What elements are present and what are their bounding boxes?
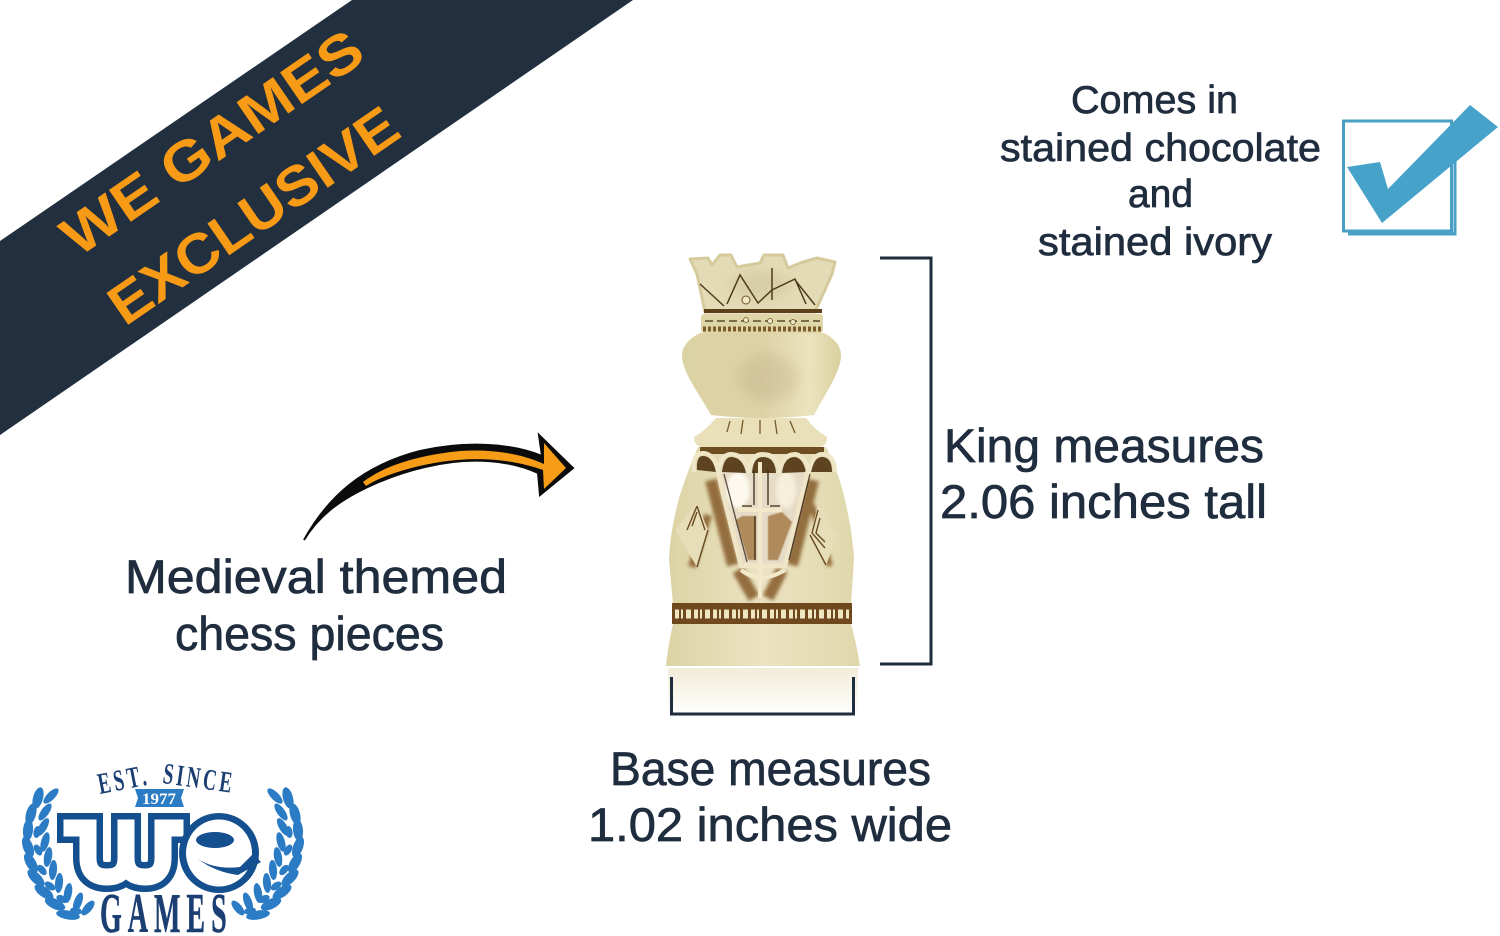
we mark [72, 813, 261, 893]
text: Medieval themed chess pieces [125, 550, 507, 660]
crown [690, 255, 835, 312]
arrow: orange curved arrow [304, 435, 573, 540]
text: Comes in stained chocolate and stained ivory: and [1128, 173, 1193, 216]
chess piece: king [666, 255, 860, 716]
text: Base measures 1.02 inches wide: 1.02 inches wide [588, 798, 952, 851]
logo: WE Games [20, 758, 306, 936]
left diamond mark [687, 506, 708, 567]
wreath left [20, 786, 97, 922]
since: SINCE [161, 758, 237, 800]
text: Medieval themed chess pieces: Medieval themed [125, 550, 507, 603]
text: King measures 2.06 inches tall: 2.06 inches tall [940, 475, 1267, 528]
text: Comes in stained chocolate and stained ivory: stained ivory [1038, 221, 1273, 264]
reflection [668, 668, 858, 716]
text: Base measures 1.02 inches wide: Base measures [610, 742, 931, 795]
shield [694, 453, 835, 598]
left diamond [675, 503, 708, 567]
shoulder [694, 418, 827, 450]
text: Comes in stained chocolate and stained ivory: Comes in [1071, 79, 1238, 122]
bowl [682, 333, 841, 418]
text: Comes in stained chocolate and stained ivory [1000, 79, 1321, 264]
shield shadows [692, 480, 830, 598]
bracket: base width [672, 677, 854, 714]
decorative band [672, 603, 852, 624]
base [666, 624, 860, 666]
text: Medieval themed chess pieces: chess pieces [175, 607, 444, 660]
right diamond [810, 505, 838, 565]
icon: blue checkbox with check mark [1344, 105, 1498, 234]
banner line: EXCLUSIVE: EXCLUSIVE [96, 94, 410, 337]
text: Comes in stained chocolate and stained ivory: stained chocolate [1000, 127, 1321, 170]
banner: WE Games Exclusive [0, 0, 633, 435]
1977 ribbon: 1977 [142, 791, 176, 808]
banner line: WE GAMES: WE GAMES [49, 17, 375, 268]
text: Base measures 1.02 inches wide [588, 742, 952, 851]
1977 ribbon [135, 789, 184, 808]
wreath right [229, 786, 306, 922]
est: EST. [95, 759, 152, 801]
bracket: king height [880, 258, 931, 664]
right diamond mark [810, 510, 826, 565]
crown collar [701, 314, 823, 333]
text: King measures 2.06 inches tall [940, 419, 1267, 528]
text: King measures 2.06 inches tall: King measures [944, 419, 1264, 472]
body [669, 447, 854, 604]
